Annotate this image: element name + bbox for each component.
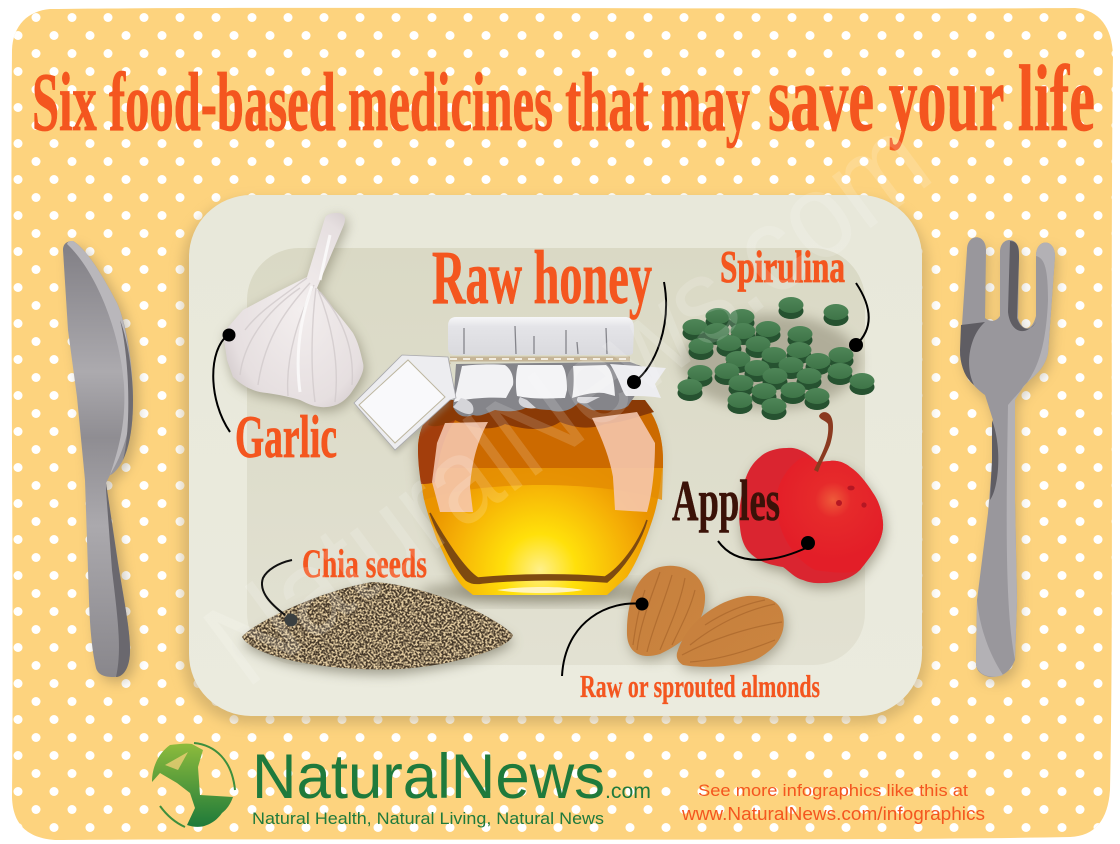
watermark: NaturalNews.com [181,90,953,711]
jar upper tone [418,400,663,468]
fork shaded parts [960,322,985,385]
cloth ruffle panels [454,364,513,402]
cloth ruffle shadow base [453,362,652,416]
callout line [718,541,808,560]
icon: fork [960,237,1058,683]
callout line [262,560,292,615]
label: chia seeds: Chia seeds [302,541,427,586]
logo .com: .com [605,780,651,803]
logo tagline: Natural Health, Natural Living, Natural News [252,809,604,828]
jar bottom rim [430,513,647,583]
icon: spirulina tablets [678,283,874,420]
icon: globe [152,743,235,827]
callout dot [284,614,298,626]
jar highlights [432,422,488,512]
knife blade bevel [67,241,131,475]
icon: honey jar [354,282,670,604]
icon: garlic [213,213,365,432]
callout: apples line and dot [718,536,815,560]
callout dot [849,338,863,352]
footer call to action [681,781,985,824]
callout dot [636,598,648,610]
label: garlic: Garlic [235,404,337,470]
footer call to action: www.NaturalNews.com/infographics [681,804,985,824]
icon: apple [739,412,885,588]
almond left [627,566,705,656]
logo: Natural News [152,742,651,828]
icon: knife [63,241,138,682]
icon: almonds [562,566,786,676]
panel: tray [182,195,928,724]
jar body [418,400,663,595]
label: raw honey: Raw honey [432,236,652,320]
twine [450,356,630,362]
callout line [634,282,666,382]
callout line [213,335,230,432]
callout line [856,283,869,345]
callout dot [801,536,815,550]
label: spirulina: Spirulina [720,241,845,292]
icon: chia seeds pile [242,560,513,674]
tag [355,359,451,454]
cloth lid [448,317,634,355]
knife handle shade [106,483,130,677]
callout line [562,604,642,676]
almond right [677,596,784,667]
title [32,47,1095,151]
footer call to action: See more infographics like this at [698,781,968,800]
label: almonds: Raw or sprouted almonds [580,668,820,704]
logo wordmark: NaturalNews [252,742,605,812]
callout dot [222,328,236,342]
callout dot [627,375,641,389]
label: apples: Apples [672,468,780,533]
